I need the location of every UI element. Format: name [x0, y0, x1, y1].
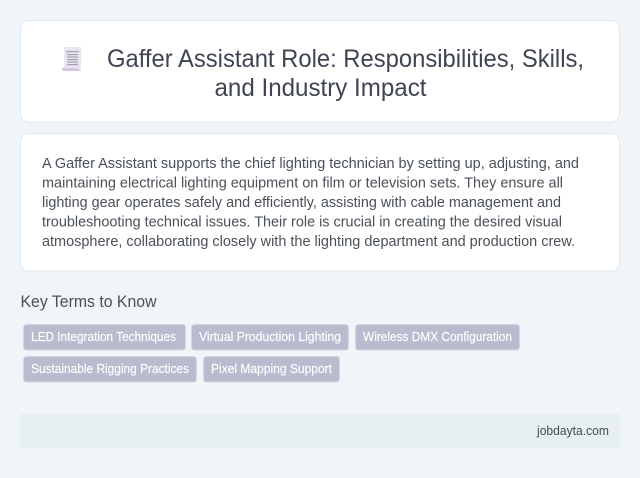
panel: title card	[20, 20, 620, 122]
tag: Sustainable Rigging Practices	[24, 356, 196, 382]
tag: Pixel Mapping Support: Pixel Mapping Support	[211, 362, 332, 376]
tag: Virtual Production Lighting: Virtual Production Lighting	[199, 330, 341, 344]
title	[107, 45, 584, 102]
footer: jobdayta.com	[536, 424, 609, 438]
description text	[42, 155, 579, 250]
heading: key terms: Key Terms to Know	[20, 293, 157, 311]
description text: A Gaffer Assistant supports the chief lighting technician by setting up, adjusting, and	[42, 155, 579, 172]
icon: document scroll	[62, 47, 81, 71]
title: and Industry Impact	[214, 74, 427, 102]
tag: LED Integration Techniques: LED Integration Techniques	[31, 330, 176, 344]
tag: Pixel Mapping Support	[204, 356, 340, 382]
title: Gaffer Assistant Role: Responsibilities, Skills,	[107, 45, 584, 73]
tag list	[24, 324, 520, 382]
footer	[20, 414, 620, 448]
panel: description card	[20, 134, 620, 271]
tag: Virtual Production Lighting	[192, 324, 348, 350]
description text: atmosphere, collaborating closely with the lighting department and production crew.	[42, 233, 575, 250]
description text: lighting gear operates safely and efficiently, assisting with cable management and	[42, 194, 561, 211]
tag: Wireless DMX Configuration	[356, 324, 520, 350]
tag: Wireless DMX Configuration: Wireless DMX Configuration	[363, 330, 512, 344]
tag: Sustainable Rigging Practices: Sustainable Rigging Practices	[31, 362, 189, 376]
tag: LED Integration Techniques	[24, 324, 186, 350]
description text: maintaining electrical lighting equipment on film or television sets. They ensure all	[42, 174, 563, 192]
description text: troubleshooting technical issues. Their role is crucial in creating the desired visual	[42, 214, 562, 230]
